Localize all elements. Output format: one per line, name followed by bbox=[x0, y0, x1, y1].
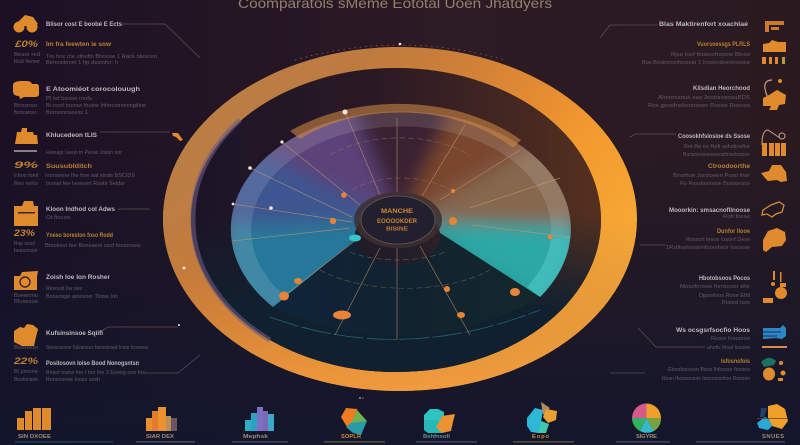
right item 6 bbox=[662, 325, 787, 382]
right item 6: Ws ocsgsrfsocfio Hoos bbox=[676, 327, 750, 334]
right item 4: Rofi fosse bbox=[723, 214, 750, 220]
central hub: BISINE bbox=[386, 226, 408, 232]
left item 5: Rlosesoe bbox=[14, 299, 38, 305]
left item 2: Pl kd bsose inofs bbox=[46, 96, 92, 102]
left item 6: Bosfonsoe bbox=[14, 377, 38, 383]
right item 3: Rot Re ox Rpfi asfvdiosfior bbox=[684, 144, 750, 150]
radial spokes bbox=[232, 112, 570, 340]
right item 6: Isfosnsfois bbox=[721, 359, 751, 365]
icon: building and bottles bbox=[762, 40, 786, 64]
central fan chart bbox=[220, 95, 580, 340]
right item 6: Rosn Ihossonsos Inosonsohoo Rosoon bbox=[662, 376, 750, 382]
left item 2: Bonsseouo bbox=[14, 110, 37, 116]
left item 3: Inonat fee Iveeoert Rostir Seidor bbox=[46, 181, 125, 187]
left item 2: Bonsonnseess 1 bbox=[46, 110, 88, 116]
right item 4: 1RsIfioshorslonfoornhsor Iosoose bbox=[666, 245, 750, 251]
left item 6: Bsonsoo bbox=[14, 345, 38, 351]
legend 4: orange green pie: SOPLR bbox=[341, 434, 362, 440]
icon: orange folders bbox=[15, 128, 38, 144]
icon: shell creature bbox=[761, 165, 787, 182]
left item 1: Rod flemer bbox=[14, 59, 40, 65]
left item 1 bbox=[14, 15, 157, 66]
icon: orange head bbox=[763, 228, 786, 252]
legend 8: orange blue blob: SNUES bbox=[762, 434, 784, 440]
scattered particles bbox=[178, 43, 401, 399]
left item 1: Blisor cost E boobé E Ects bbox=[46, 21, 122, 28]
icon: outlined rack bbox=[765, 21, 784, 32]
icon: cluster of circles bbox=[14, 15, 38, 32]
lower cyan arc bbox=[270, 310, 540, 339]
left item 5: Resosst Iiw oes bbox=[46, 286, 82, 292]
icon: camera bbox=[14, 271, 38, 290]
right item 2: Ros gonsfnoloosnsser Rosoe Rosoos bbox=[648, 103, 750, 109]
connector lines bbox=[100, 24, 705, 373]
right item 5 bbox=[680, 271, 787, 306]
legend 2: orange bars fading: SIAR DEX bbox=[146, 434, 174, 440]
legend 6: multicolour gem: Eopo bbox=[532, 434, 549, 440]
right item 3: Bonsoeosoesneosfinoolosoon bbox=[683, 152, 750, 158]
concentric arcs bbox=[320, 138, 490, 288]
left item 2: E Atoomiéot corocolouugh bbox=[46, 86, 140, 93]
right column bbox=[642, 21, 787, 382]
ring interior bbox=[191, 68, 601, 372]
right item 3: Coosokhfslosioe ds Ssose bbox=[678, 133, 750, 140]
left item 4: Rop ooud bbox=[14, 241, 35, 247]
legend 2: orange bars fading bbox=[136, 407, 195, 442]
right item 4: Rossoh Iesoe Iosonf Dese bbox=[686, 237, 750, 243]
left item 4: 23% bbox=[13, 228, 36, 239]
central hub: MANCHE bbox=[381, 209, 413, 215]
left item 2: Bnsorso bbox=[14, 103, 37, 109]
legend 3: blue purple bars: Mephsk bbox=[243, 434, 269, 440]
right item 3: Brsohoe Joroloeen Poso fnor bbox=[673, 173, 750, 179]
right item 1: Blas Maktirenfort xoachlaé bbox=[659, 21, 748, 28]
icon: stethoscope bbox=[763, 79, 786, 110]
left item 1: Tre hoc ine sthefin Bhoose 1 Rack blesoon bbox=[46, 54, 157, 60]
bottom legend bbox=[15, 402, 788, 442]
left item 2: Bi coorl toorsw thuine Inforcommongitine bbox=[46, 103, 146, 109]
left item 1: Im fra feewten ie sow bbox=[46, 42, 111, 48]
left item 5 bbox=[14, 271, 118, 305]
fan outer band bbox=[231, 111, 571, 307]
right item 4: Dunfor Ilooe bbox=[717, 229, 751, 235]
legend 1: orange bars: SIN DXOEE bbox=[18, 434, 51, 440]
left item 6: Sensosonor fulsoness fanosnoed Inoor fosoeos bbox=[46, 345, 148, 351]
left column bbox=[13, 15, 157, 383]
legend 3: blue purple bars bbox=[232, 407, 288, 442]
outer orange ring bbox=[163, 47, 637, 391]
spoke nodes bbox=[232, 110, 552, 320]
left item 2 bbox=[13, 81, 146, 116]
fan colour sectors bbox=[230, 112, 571, 307]
right item 2: Ahnorssnuk eas 3estorsoosuBDS bbox=[658, 95, 751, 101]
left item 3: Inorsonne Ihe hoe aat sinde BSCIDS bbox=[45, 173, 136, 179]
right item 2 bbox=[648, 79, 786, 110]
left item 6: Bl proone bbox=[14, 369, 38, 375]
icon: outlined animal bbox=[762, 202, 784, 217]
right item 1 bbox=[642, 21, 786, 66]
right item 1: Rjse Ioof thosoofnosne Bloos bbox=[671, 52, 750, 58]
left item 5: Bonsosge amesoer Tistse Ioh bbox=[46, 294, 118, 300]
right item 1: Bos Bostrsnsnfoosoer 1 Inosondoenesosoe bbox=[642, 60, 750, 66]
left item 6: Kufsinsinsoe Sqiifi bbox=[46, 330, 103, 337]
right item 4 bbox=[666, 202, 786, 252]
right item 5: Rosost Ioos bbox=[722, 300, 750, 306]
left item 4: Kloon Indhod col Adws bbox=[46, 206, 115, 213]
legend 7: colour wheel bbox=[616, 404, 670, 442]
icon: orange box bbox=[14, 201, 38, 226]
legend 5: teal blob bbox=[416, 409, 477, 442]
right item 5: Hbotobsoos Pocos bbox=[699, 275, 750, 282]
icon: blue wave bbox=[762, 325, 787, 348]
left item 3: Hesuigr Iseon in Peore Ustoh eor bbox=[46, 150, 122, 156]
legend 6: multicolour gem bbox=[513, 402, 574, 442]
right item 5: Mosofonsoe fomsosor sfor bbox=[680, 284, 750, 290]
central hub: EOOOOKDER bbox=[377, 219, 418, 225]
left item 6: 22% bbox=[13, 356, 39, 367]
left item 1: Besor red bbox=[14, 52, 40, 58]
left item 4: Ot fisoos bbox=[46, 215, 70, 221]
legend 7: colour wheel: SIGYRE bbox=[636, 434, 657, 440]
icon: teal fruit bbox=[761, 358, 786, 381]
left item 3: Khlucedeon tLIS bbox=[46, 132, 98, 139]
legend 4: orange green pie bbox=[324, 408, 385, 442]
left item 6 bbox=[13, 324, 148, 383]
right item 1: Vuorsoessgs PLRLS bbox=[697, 42, 750, 48]
central hub bbox=[354, 192, 442, 248]
right teal edge bbox=[527, 235, 570, 297]
right item 6: Rosor Iosoorso bbox=[711, 336, 750, 342]
left item 4 bbox=[13, 201, 140, 254]
left item 4: Btooksor fae Bonsaest sasf foosoowa bbox=[45, 243, 140, 249]
right item 2: Kilsdian Heorchood bbox=[693, 85, 750, 92]
left item 6: Brisot Ioshe fne I Ino fee 3 Eooog ooe fos bbox=[46, 370, 145, 376]
left item 3: Ehoo fonil bbox=[14, 173, 38, 179]
lower dark sector bbox=[273, 233, 540, 336]
icon: folder with hand bbox=[14, 324, 38, 346]
icon: columns with crane bbox=[762, 130, 786, 156]
right item 6: ahofis Ihosf Isoone bbox=[707, 345, 750, 351]
legend 8: orange blue blob bbox=[696, 404, 788, 442]
right item 3 bbox=[673, 130, 787, 187]
left item 5: Zoish Ioe Ion Rosher bbox=[46, 274, 111, 281]
right item 3: Ctroodoorthe bbox=[708, 164, 751, 170]
left item 3 bbox=[14, 128, 136, 187]
left item 6: Positosovn Ioiso Bood Nonogsntsn bbox=[46, 360, 139, 367]
right item 3: Ro Rosshoonsoe Bosoonsos bbox=[680, 181, 750, 187]
icon: scattered shapes bbox=[763, 271, 787, 303]
legend 1: orange bars bbox=[15, 408, 113, 442]
left item 6: Ronsoonee Inosn sosh bbox=[46, 377, 100, 383]
fan top band highlight bbox=[290, 104, 521, 148]
dotted orbit above ring bbox=[295, 45, 505, 60]
left item 3: Reo rorhs bbox=[14, 181, 38, 187]
icon: orange rounded blob bbox=[13, 81, 39, 99]
right item 5: Djposfoos Rose Elfd bbox=[699, 293, 750, 299]
left item 3: Suusublditch bbox=[46, 164, 92, 170]
right item 4: Mooorkin: smsacnofllnoose bbox=[669, 207, 750, 214]
left item 1: £0% bbox=[14, 39, 39, 50]
left item 4: bessonsor bbox=[14, 248, 38, 254]
legend 5: teal blob: Behfnsofi bbox=[423, 434, 450, 440]
left item 4: Yneso boreston foso Rodd bbox=[46, 233, 113, 239]
left item 1: Benesitenet 1 hp desinfor: h bbox=[46, 60, 118, 66]
right item 6: Ehoofsosoon Bsos Ihfosnor fooons bbox=[668, 367, 750, 373]
left item 5: Boeenmo bbox=[14, 293, 38, 299]
left item 3: 9% bbox=[14, 160, 39, 171]
